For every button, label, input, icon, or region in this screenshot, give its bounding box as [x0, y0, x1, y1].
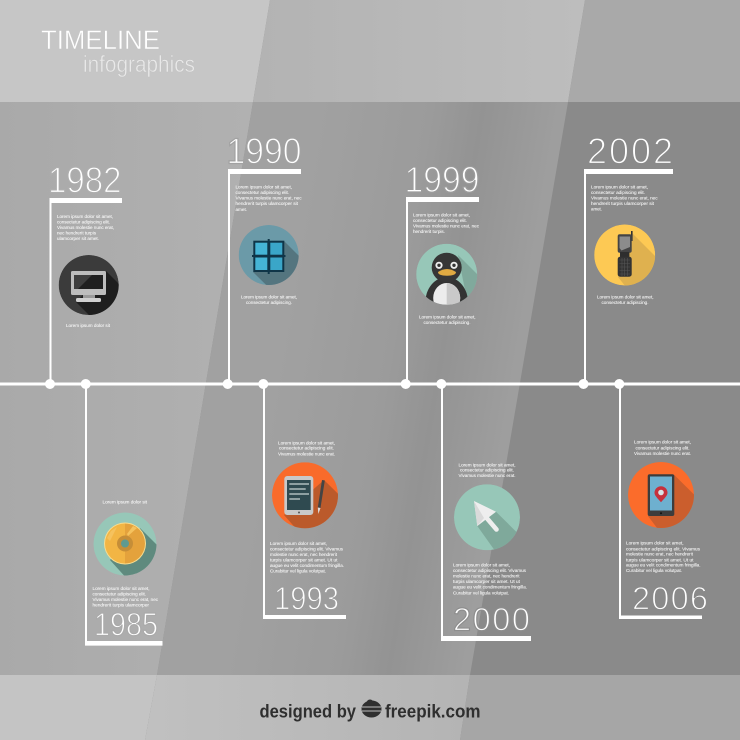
year 1993: 1993 [274, 580, 339, 616]
text: designed by: designed by [260, 702, 356, 722]
text block: consectetur adipiscing elit. [236, 190, 289, 196]
text block: molestie nunc erat, nec hendrerit [626, 552, 694, 558]
caption: Vivamus molestie nunc erat. [278, 452, 335, 458]
subheading: infographics: infographics [83, 51, 195, 77]
text block: Lorem ipsum dolor sit amet, [591, 185, 648, 191]
year 1985: 1985 [94, 606, 158, 642]
text block [413, 213, 480, 235]
text block: hendrerit turpis ulamcorper sit [236, 201, 299, 207]
icon: compact disc [94, 512, 156, 576]
text block: ulamcorper sit amet. [57, 236, 99, 242]
text block [270, 541, 344, 575]
connector and year bar [50, 198, 122, 384]
year 1999: 1999 [404, 159, 480, 200]
icon: phone with map pin [628, 462, 694, 528]
text block: Vivamus molestie nunc erat, [57, 225, 114, 231]
text block: molestie nunc erat, nec hendrerit [453, 574, 520, 580]
icon: freepik logo [362, 700, 382, 718]
text block: augue eu velit condimentum fringilla. [270, 563, 344, 569]
caption: Vivamus molestie nunc erat. [634, 451, 691, 457]
panel: 1999 [406, 166, 479, 380]
text block: consectetur adipiscing elit. Vivamus [626, 546, 701, 552]
caption: Lorem ipsum dolor sit amet, [278, 440, 335, 446]
text block: Lorem ipsum dolor sit amet, [57, 214, 113, 220]
caption [241, 295, 297, 306]
year 2000: 2000 [453, 602, 530, 638]
connector and year bar [441, 384, 531, 641]
icon: mobile phone [594, 224, 656, 286]
text block: hendrerit turpis. [413, 229, 445, 235]
text block: Vivamus molestie nunc erat, nec [413, 224, 480, 230]
text block: amet. [236, 207, 247, 213]
caption: consectetur adipiscing elit. [636, 445, 690, 451]
text block: hendrerit turpis ulamcorper [92, 603, 149, 609]
text: freepik.com: freepik.com [385, 702, 480, 722]
footer credit [260, 700, 480, 722]
caption: Lorem ipsum dolor sit amet, [419, 315, 476, 321]
text block [57, 214, 114, 242]
text block: Lorem ipsum dolor sit amet, [236, 185, 292, 191]
icon: cursor arrow [454, 484, 520, 550]
caption [278, 440, 335, 458]
text block: Lorem ipsum dolor sit amet, [626, 541, 684, 547]
connector and year bar [263, 384, 346, 619]
panel: 2002 [584, 138, 673, 380]
caption [634, 440, 691, 457]
caption: Lorem ipsum dolor sit [66, 323, 111, 329]
text block: turpis ulamcorper sit amet. Ut ut [453, 579, 521, 585]
text block: molestie nunc erat, nec hendrerit [270, 552, 338, 558]
text block: Lorem ipsum dolor sit amet, [92, 586, 150, 592]
text block: consectetur adipiscing elit. [591, 190, 645, 196]
year 1990: 1990 [226, 131, 302, 172]
connector and year bar [85, 384, 162, 646]
text block: Curabitur vel ligula volutpat. [270, 569, 326, 575]
caption: consectetur adipiscing. [424, 320, 470, 326]
icon: tablet and pencil [272, 462, 338, 528]
text block: Lorem ipsum dolor sit amet, [413, 213, 470, 219]
text block: Vivamus molestie nunc erat, nec [92, 597, 159, 603]
text block: augue eu velit condimentum fringilla. [453, 585, 527, 591]
text block [626, 541, 701, 574]
caption: Vivamus molestie nunc erat. [458, 473, 516, 479]
panel: 1982 [50, 168, 122, 380]
caption: consectetur adipiscing. [602, 300, 648, 306]
text block: augue eu velit condimentum fringilla. [626, 563, 700, 569]
caption: Lorem ipsum dolor sit amet, [241, 295, 297, 301]
caption: consectetur adipiscing. [246, 300, 292, 306]
text block [236, 185, 302, 213]
connector and year bar [228, 169, 301, 384]
panel: 1990 [228, 138, 302, 380]
text block: turpis ulamcorper sit amet. Ut ut [626, 557, 694, 563]
year 1982: 1982 [48, 160, 122, 201]
connector and year bar [406, 197, 479, 384]
text block: consectetur adipiscing elit. Vivamus [453, 568, 527, 574]
text block: nec hendrerit turpis [57, 231, 97, 237]
panel: 1993 [263, 388, 346, 619]
text block: Lorem ipsum dolor sit amet, [453, 563, 510, 569]
title [41, 25, 195, 77]
year 2006: 2006 [632, 580, 708, 616]
year 2002: 2002 [587, 131, 673, 172]
caption [597, 295, 654, 306]
caption: consectetur adipiscing elit. [279, 446, 334, 452]
text block: Vivamus molestie nunc erat, nec [236, 196, 302, 202]
text block: consectetur adipiscing elit. [92, 592, 146, 598]
panel: 1985 [85, 388, 162, 646]
text block [453, 563, 527, 596]
caption [458, 462, 516, 479]
text block: Curabitur vel ligula volutpat. [453, 590, 509, 596]
heading: TIMELINE: TIMELINE [41, 25, 160, 55]
text block: turpis ulamcorper sit amet. Ut ut [270, 558, 338, 564]
panel: 2006 [619, 388, 706, 619]
connector and year bar [584, 169, 673, 384]
text block: hendrerit turpis ulamcorper sit [591, 201, 655, 207]
icon: monitor [58, 255, 119, 315]
caption: Lorem ipsum dolor sit amet, [634, 440, 691, 446]
text block [92, 586, 159, 609]
text block: consectetur adipiscing elit. Vivamus [270, 547, 344, 553]
connector and year bar [619, 384, 702, 619]
caption: Lorem ipsum dolor sit [102, 499, 148, 505]
caption: consectetur adipiscing elit. [460, 468, 514, 474]
caption [419, 315, 476, 326]
caption: Lorem ipsum dolor sit amet, [597, 295, 654, 301]
text block: consectetur adipiscing elit. [413, 218, 467, 224]
text block: Curabitur vel ligula volutpat. [626, 568, 682, 574]
text block: consectetur adipiscing elit. [57, 220, 110, 226]
icon: penguin [416, 244, 478, 305]
caption: Lorem ipsum dolor sit amet, [458, 462, 516, 468]
panel: 2000 [441, 388, 531, 641]
timeline axis with dots [0, 379, 740, 389]
text block: amet. [591, 207, 602, 213]
icon: window [238, 225, 299, 285]
text block: Lorem ipsum dolor sit amet, [270, 541, 327, 547]
text block: Vivamus molestie nunc erat, nec [591, 196, 658, 202]
text block [591, 185, 658, 213]
